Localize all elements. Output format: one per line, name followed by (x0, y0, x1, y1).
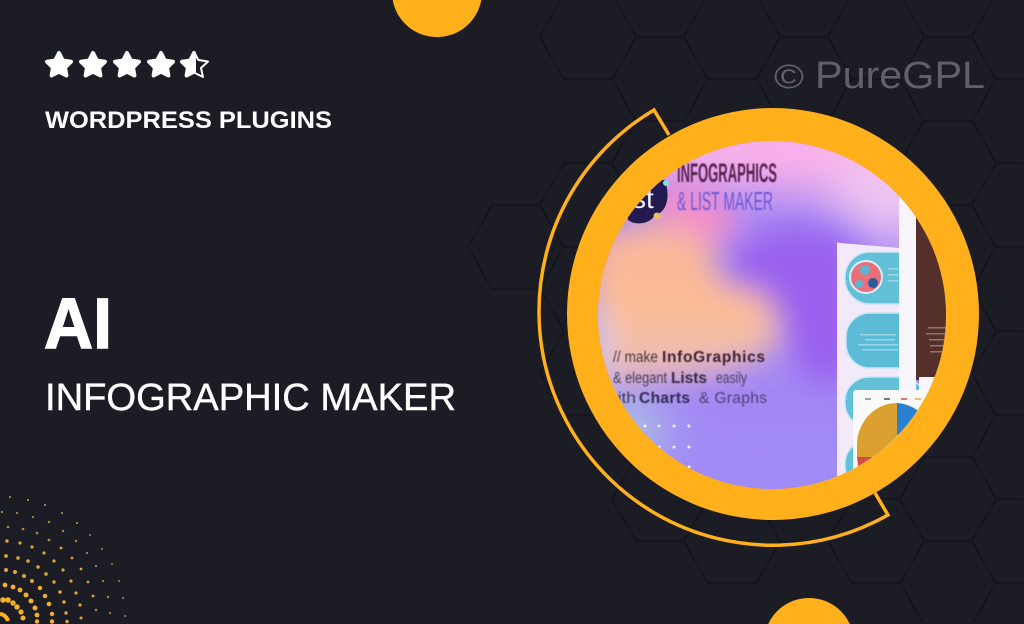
pie chart card (853, 390, 929, 469)
product image: INFOGRAPHICS (677, 158, 777, 188)
category label: WORDPRESS PLUGINS (45, 107, 332, 134)
teal pill 2 (845, 312, 899, 369)
pill icon (850, 261, 882, 293)
chart legend (865, 398, 921, 400)
tagline in image: & elegant (613, 370, 668, 387)
decorative orange arc (539, 110, 888, 545)
tagline in image: with (604, 390, 636, 407)
subheading in image: & LIST MAKER (677, 186, 773, 216)
tagline in image (604, 349, 767, 407)
watermark: PureGPL (815, 55, 985, 97)
white dots (644, 424, 690, 468)
tagline in image: Charts (639, 390, 690, 407)
product image (598, 141, 946, 489)
star 3 (115, 53, 139, 76)
tagline in image: Lists (671, 370, 707, 387)
top orange circle (393, 0, 481, 37)
star 1 (47, 53, 71, 76)
tagline in image: // make (613, 349, 658, 366)
pie wedge: blue (897, 403, 918, 435)
half star (182, 52, 208, 77)
tagline in image: InfoGraphics (662, 349, 765, 366)
pie wedge: gold (857, 403, 897, 458)
watermark: © (774, 58, 804, 96)
gradient mesh background (598, 141, 946, 489)
title: product name: INFOGRAPHIC MAKER (45, 377, 456, 419)
hexagon pattern (468, 0, 1023, 623)
logo blob (628, 180, 669, 224)
tall white panel (899, 197, 916, 392)
pie wedge: red (857, 457, 872, 466)
orange ring (567, 108, 979, 520)
bottom orange circle (768, 598, 850, 624)
white list card (837, 242, 926, 500)
teal pill 3 (845, 377, 925, 427)
star 2 (81, 53, 105, 76)
brown panel (916, 218, 946, 397)
tagline in image: & Graphs (699, 390, 767, 407)
star rating (47, 52, 208, 77)
star 4 (149, 53, 173, 76)
teal pill 1 (844, 251, 899, 305)
teal pill 4 (844, 440, 893, 473)
corner dot pattern (0, 496, 126, 624)
logo blob: st (632, 183, 654, 214)
title: AI: AI (44, 285, 112, 364)
tagline in image: easily (716, 370, 747, 387)
